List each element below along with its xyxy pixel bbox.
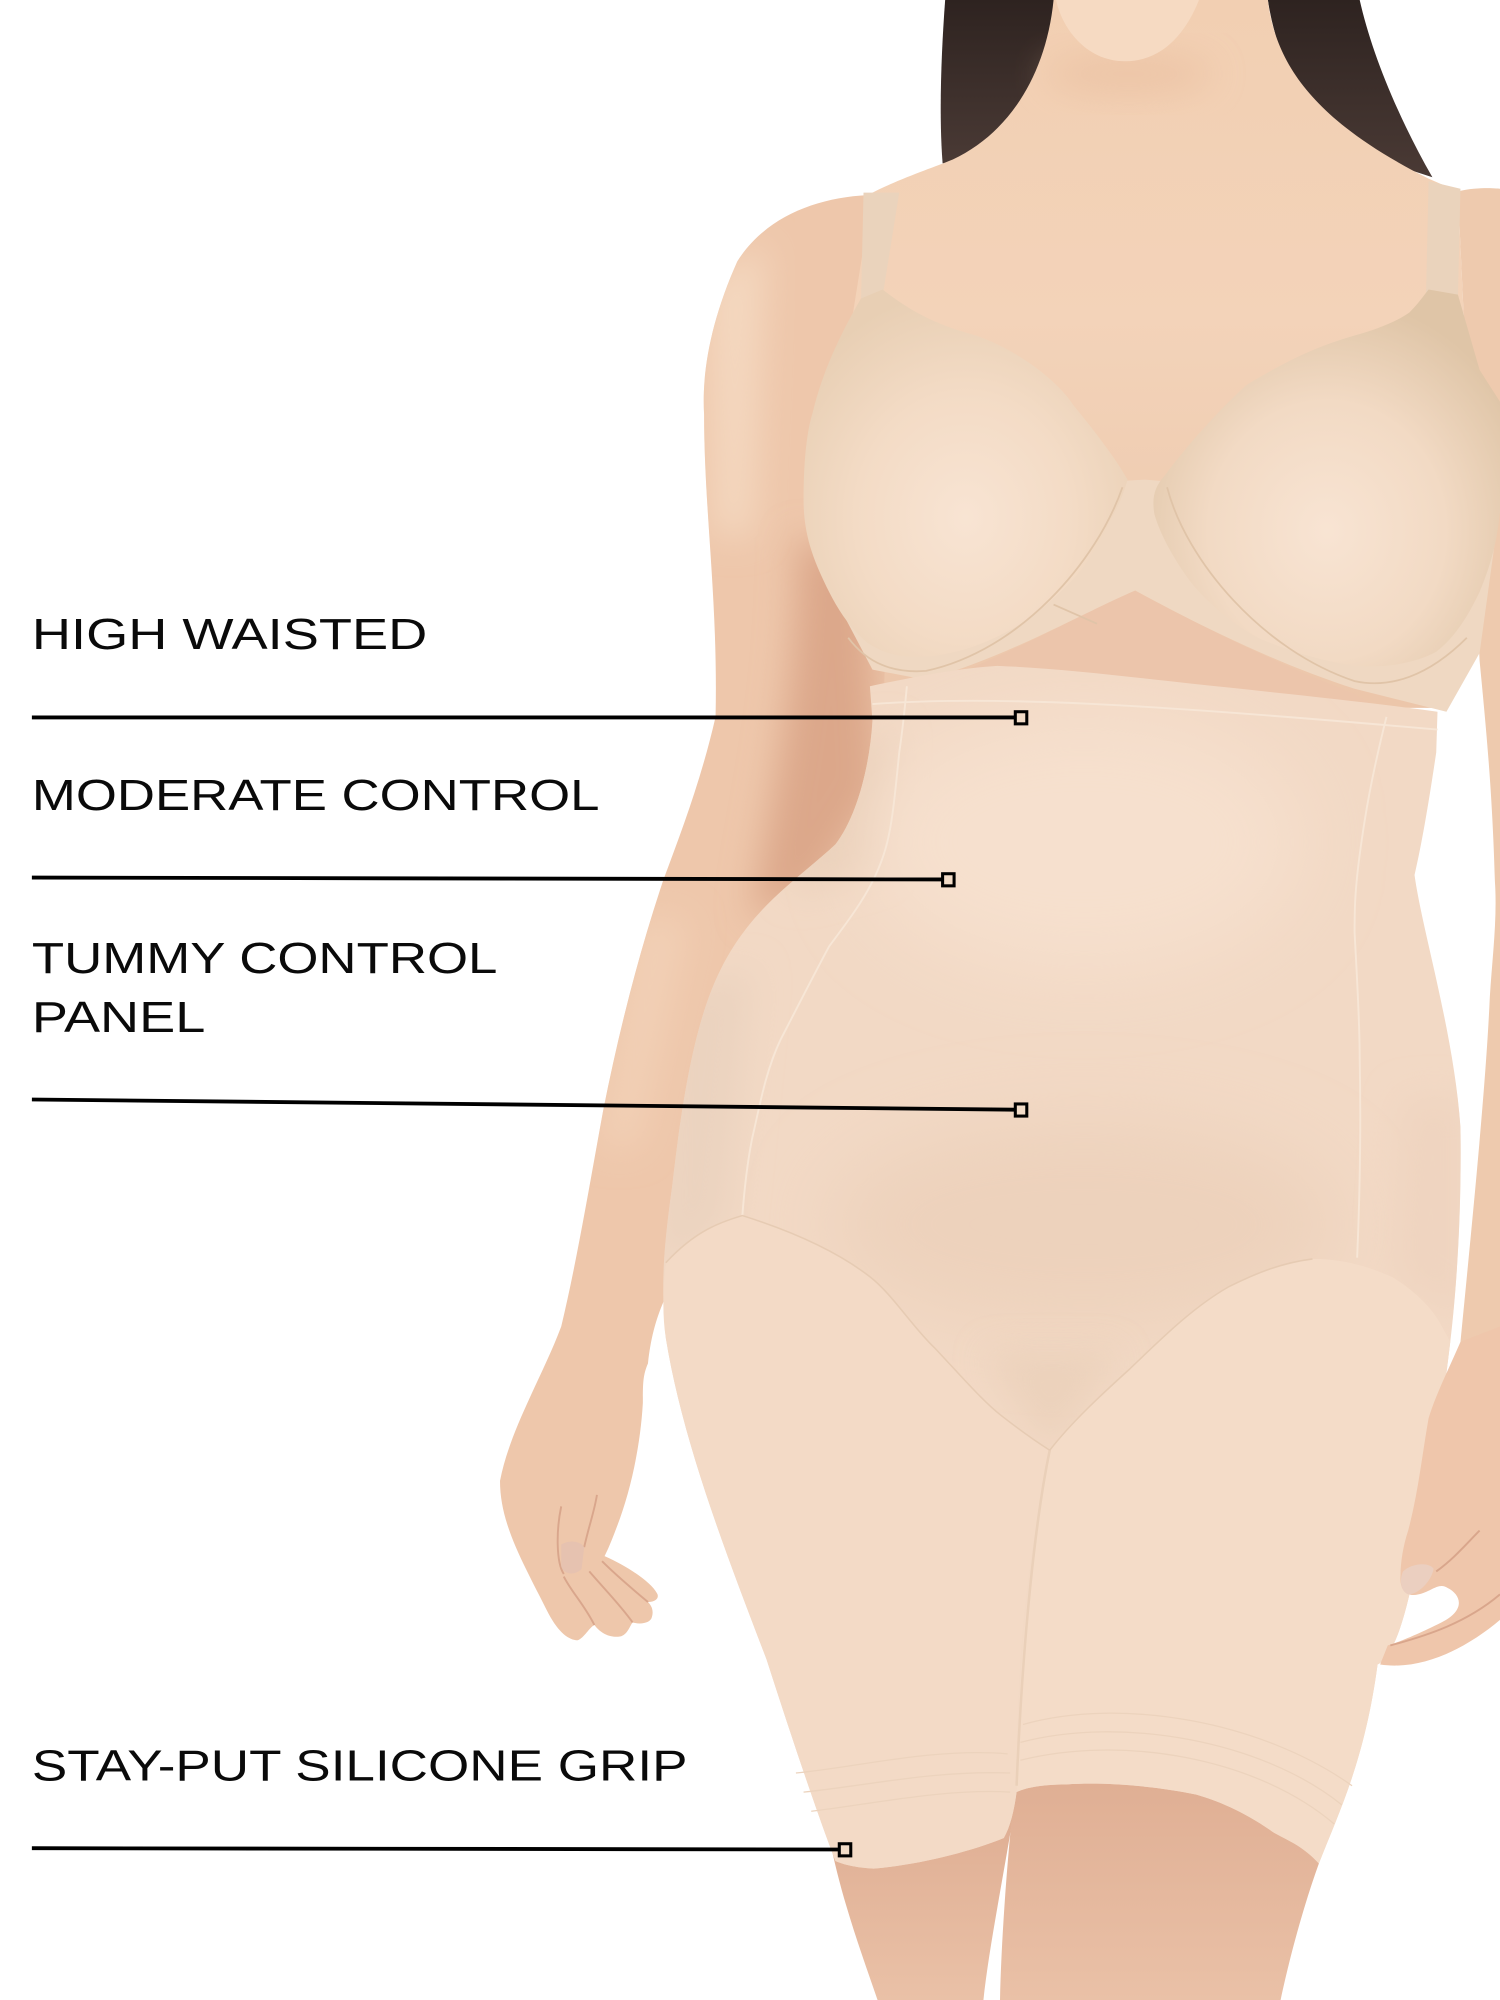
thigh panel right [1017, 1259, 1450, 1864]
label: moderate control: MODERATE CONTROL [32, 772, 599, 820]
shaping shorts [657, 666, 1467, 1869]
bra straps [861, 193, 899, 304]
right hand [1380, 1327, 1500, 1666]
callout: tummy control panel [32, 935, 1027, 1116]
left cup [804, 290, 1128, 657]
neck shadow [1045, 54, 1213, 94]
leader line: tummy control panel [32, 1099, 1027, 1116]
thigh panel left [663, 1216, 1050, 1869]
right cup [1153, 290, 1500, 666]
label: tummy control panel: TUMMY CONTROL [32, 935, 497, 983]
chin [1056, 0, 1199, 61]
right finger creases [1390, 1531, 1500, 1645]
lower legs [829, 1773, 1327, 2000]
left arm and hand [500, 195, 880, 1640]
silicone grip bands [796, 1713, 1352, 1824]
label: stay-put silicone grip: STAY-PUT SILICONE GRIP [32, 1743, 687, 1791]
callout: high waisted [32, 611, 1027, 724]
left thumb nail [561, 1541, 584, 1573]
shorts body [663, 666, 1461, 1869]
label: tummy control panel: PANEL [32, 994, 205, 1042]
leader line: moderate control [32, 874, 954, 886]
callout: moderate control [32, 772, 954, 886]
left thumb and finger creases [558, 1495, 648, 1625]
model photo illustration [500, 0, 1500, 2000]
shorts soft shading [657, 714, 1467, 1450]
midriff skin [918, 591, 1390, 714]
arm shading [599, 242, 880, 1148]
panel edge seams [666, 1216, 1312, 1450]
neck, chest and shoulders [804, 0, 1480, 708]
right thumb nail [1401, 1564, 1434, 1594]
label: high waisted: HIGH WAISTED [32, 611, 427, 659]
leader line: high waisted [32, 712, 1027, 724]
shorts seams [742, 686, 1438, 1258]
hair [941, 0, 1432, 177]
right arm [1458, 188, 1500, 1352]
bra band [804, 480, 1500, 712]
callout: stay-put silicone grip [32, 1743, 851, 1856]
bra underwire seams [848, 487, 1467, 683]
bra [804, 181, 1500, 712]
inner thigh shadow [1017, 1450, 1050, 1786]
leader line: stay-put silicone grip [32, 1844, 851, 1856]
